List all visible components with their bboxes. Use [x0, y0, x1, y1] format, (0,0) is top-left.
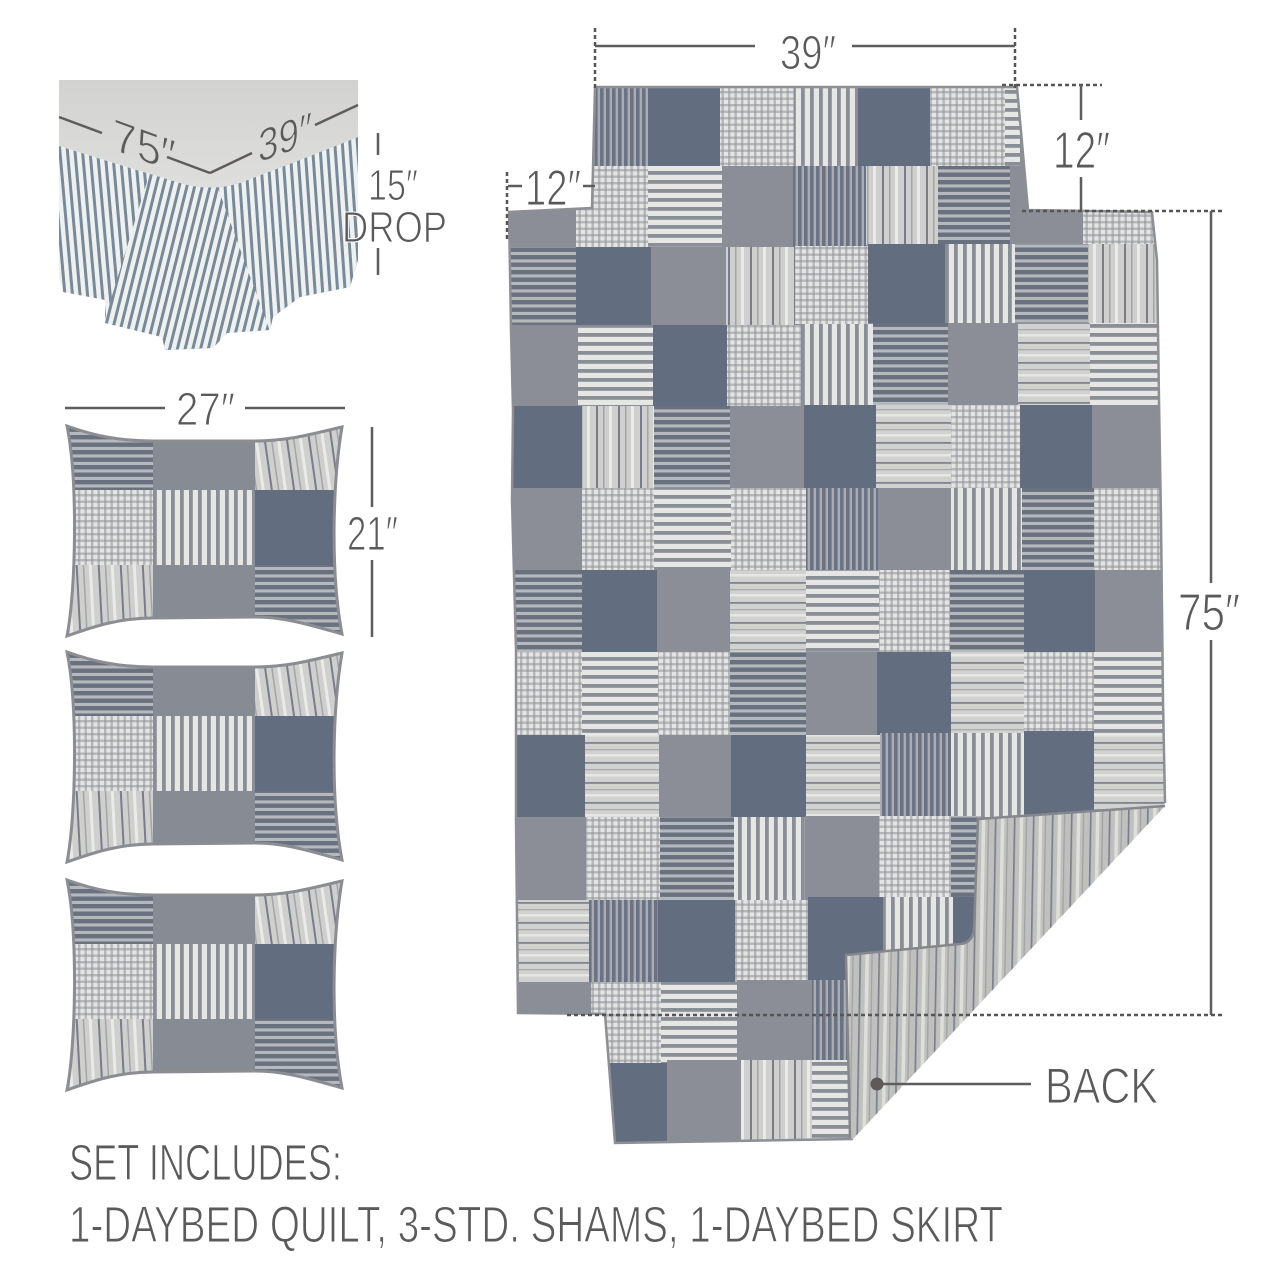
dimension: quilt top width 39 inches	[595, 27, 1015, 88]
dimension: skirt 39 inch width: 39″	[258, 103, 312, 174]
fold edge	[846, 806, 1165, 1138]
dimension: right notch 12 inches: 12″	[1053, 122, 1110, 180]
callout: back of quilt	[870, 1058, 1158, 1114]
panel: pillow sham 3	[60, 874, 350, 1094]
dimension: 15 inch drop: 15″	[368, 161, 418, 210]
bed top surface	[59, 80, 358, 188]
text block: set includes	[69, 1134, 1003, 1253]
dimension: sham 27 inch width: 27″	[176, 383, 235, 435]
quilt binding edge	[509, 87, 1165, 1143]
callout: back of quilt: BACK	[1045, 1058, 1158, 1114]
dimension: left notch 12 inches: 12″	[525, 160, 581, 216]
dimension: left notch 12 inches	[507, 160, 595, 240]
set contents: 1-DAYBED QUILT, 3-STD. SHAMS, 1-DAYBED SKIRT	[69, 1196, 1003, 1253]
dimension: quilt top width 39 inches: 39″	[780, 27, 836, 80]
dimension: skirt 39 inch width	[210, 103, 358, 174]
striped skirt fabric	[59, 137, 358, 350]
dimension: 15 inch drop: DROP	[342, 203, 447, 252]
patchwork squares	[500, 80, 1180, 1150]
panel: pillow sham 2	[60, 646, 350, 866]
folded back corner	[846, 806, 1165, 1139]
dimension: right notch 12 inches	[1002, 85, 1110, 210]
dimension: 15 inch drop	[342, 133, 447, 275]
dimension: skirt 75 inch length	[59, 109, 210, 184]
panel: pillow sham 1	[60, 420, 350, 640]
dimension: quilt length 75 inches: 75″	[1178, 584, 1240, 642]
panel: patchwork quilt	[500, 80, 1180, 1150]
panel: bed skirt photo	[50, 80, 370, 360]
dimension: sham 21 inch height: 21″	[347, 508, 398, 561]
dimension: skirt 75 inch length: 75″	[113, 109, 176, 184]
heading: SET INCLUDES:	[69, 1134, 342, 1191]
